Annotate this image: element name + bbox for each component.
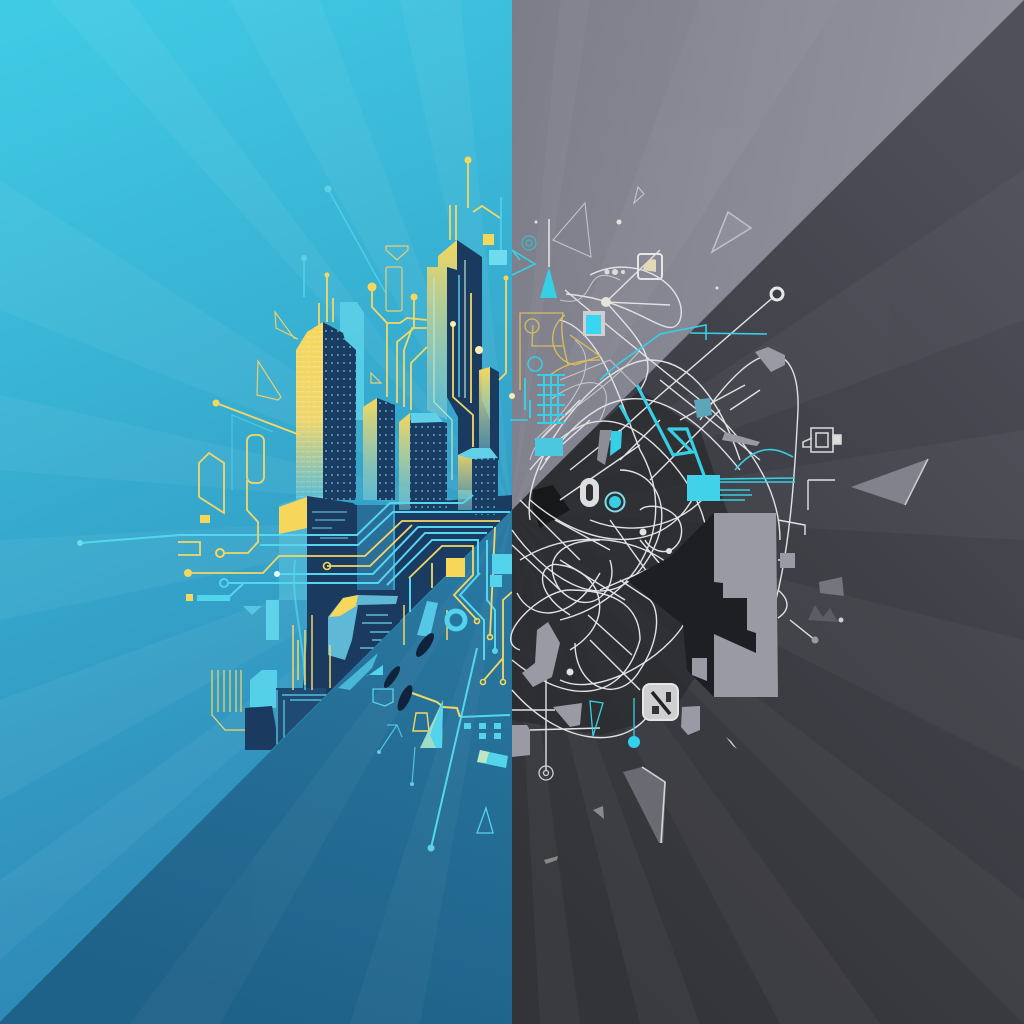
small shards bottom <box>544 806 604 864</box>
background: right grey half <box>512 0 1024 1024</box>
cyan tag <box>610 431 622 456</box>
small shards right <box>726 577 844 749</box>
chips and nodes on the blue side <box>77 156 515 852</box>
background: left blue half <box>0 0 512 1024</box>
node: top right <box>771 288 783 300</box>
dark textured backdrop under the tangle <box>512 390 730 735</box>
circuit traces: blue <box>80 189 510 848</box>
large shard right <box>851 459 928 505</box>
large grey slab <box>714 513 778 697</box>
decorative outlines on the blue side <box>257 246 408 400</box>
building: tower E <box>458 448 498 515</box>
ring terminal <box>539 766 553 780</box>
icon: right square <box>803 428 841 452</box>
node: upper tile <box>601 254 662 307</box>
triangle outline shard top <box>712 212 751 252</box>
cyan outline triangle low <box>590 698 634 740</box>
building: tower F <box>479 367 499 460</box>
cyan traces <box>510 250 795 500</box>
illustration: chaotic tangle <box>510 187 928 864</box>
circuit traces: yellow <box>178 160 512 731</box>
building: small bottom-left blocks <box>245 600 330 750</box>
tangled white lines <box>511 250 835 770</box>
pale junction dots <box>534 220 718 676</box>
cyan node <box>628 736 640 748</box>
building: tower B <box>427 240 490 490</box>
cyan window tile <box>583 311 605 336</box>
cyan grid panel <box>525 375 565 423</box>
cyan cone on stem <box>540 219 557 298</box>
building: pale blue tower <box>340 302 364 420</box>
target rings <box>522 236 624 512</box>
dark ground mass behind the lower city <box>302 495 512 688</box>
cyan chip square <box>687 475 720 501</box>
cyan hatch panel <box>535 438 563 456</box>
illustration: orderly circuit city <box>77 156 515 852</box>
black blot <box>533 485 570 528</box>
building: lower block G <box>279 496 357 600</box>
building: tower C <box>363 398 395 500</box>
black stepped silhouette <box>627 513 756 697</box>
glyph: zero-shaped tile <box>583 481 596 504</box>
thick cyan circuit <box>620 385 705 478</box>
building: tower D <box>399 413 447 510</box>
grey fragments <box>512 347 795 757</box>
building: tower A <box>296 322 356 500</box>
icon: crossed tile <box>643 684 678 720</box>
yellow outlines in the grey wedge <box>520 313 600 390</box>
shards on the lower blue triangle <box>338 601 508 833</box>
building: lower pieces <box>307 590 400 720</box>
pale tangled lines in the grey wedge <box>530 187 644 460</box>
large shard bottom <box>623 767 666 843</box>
